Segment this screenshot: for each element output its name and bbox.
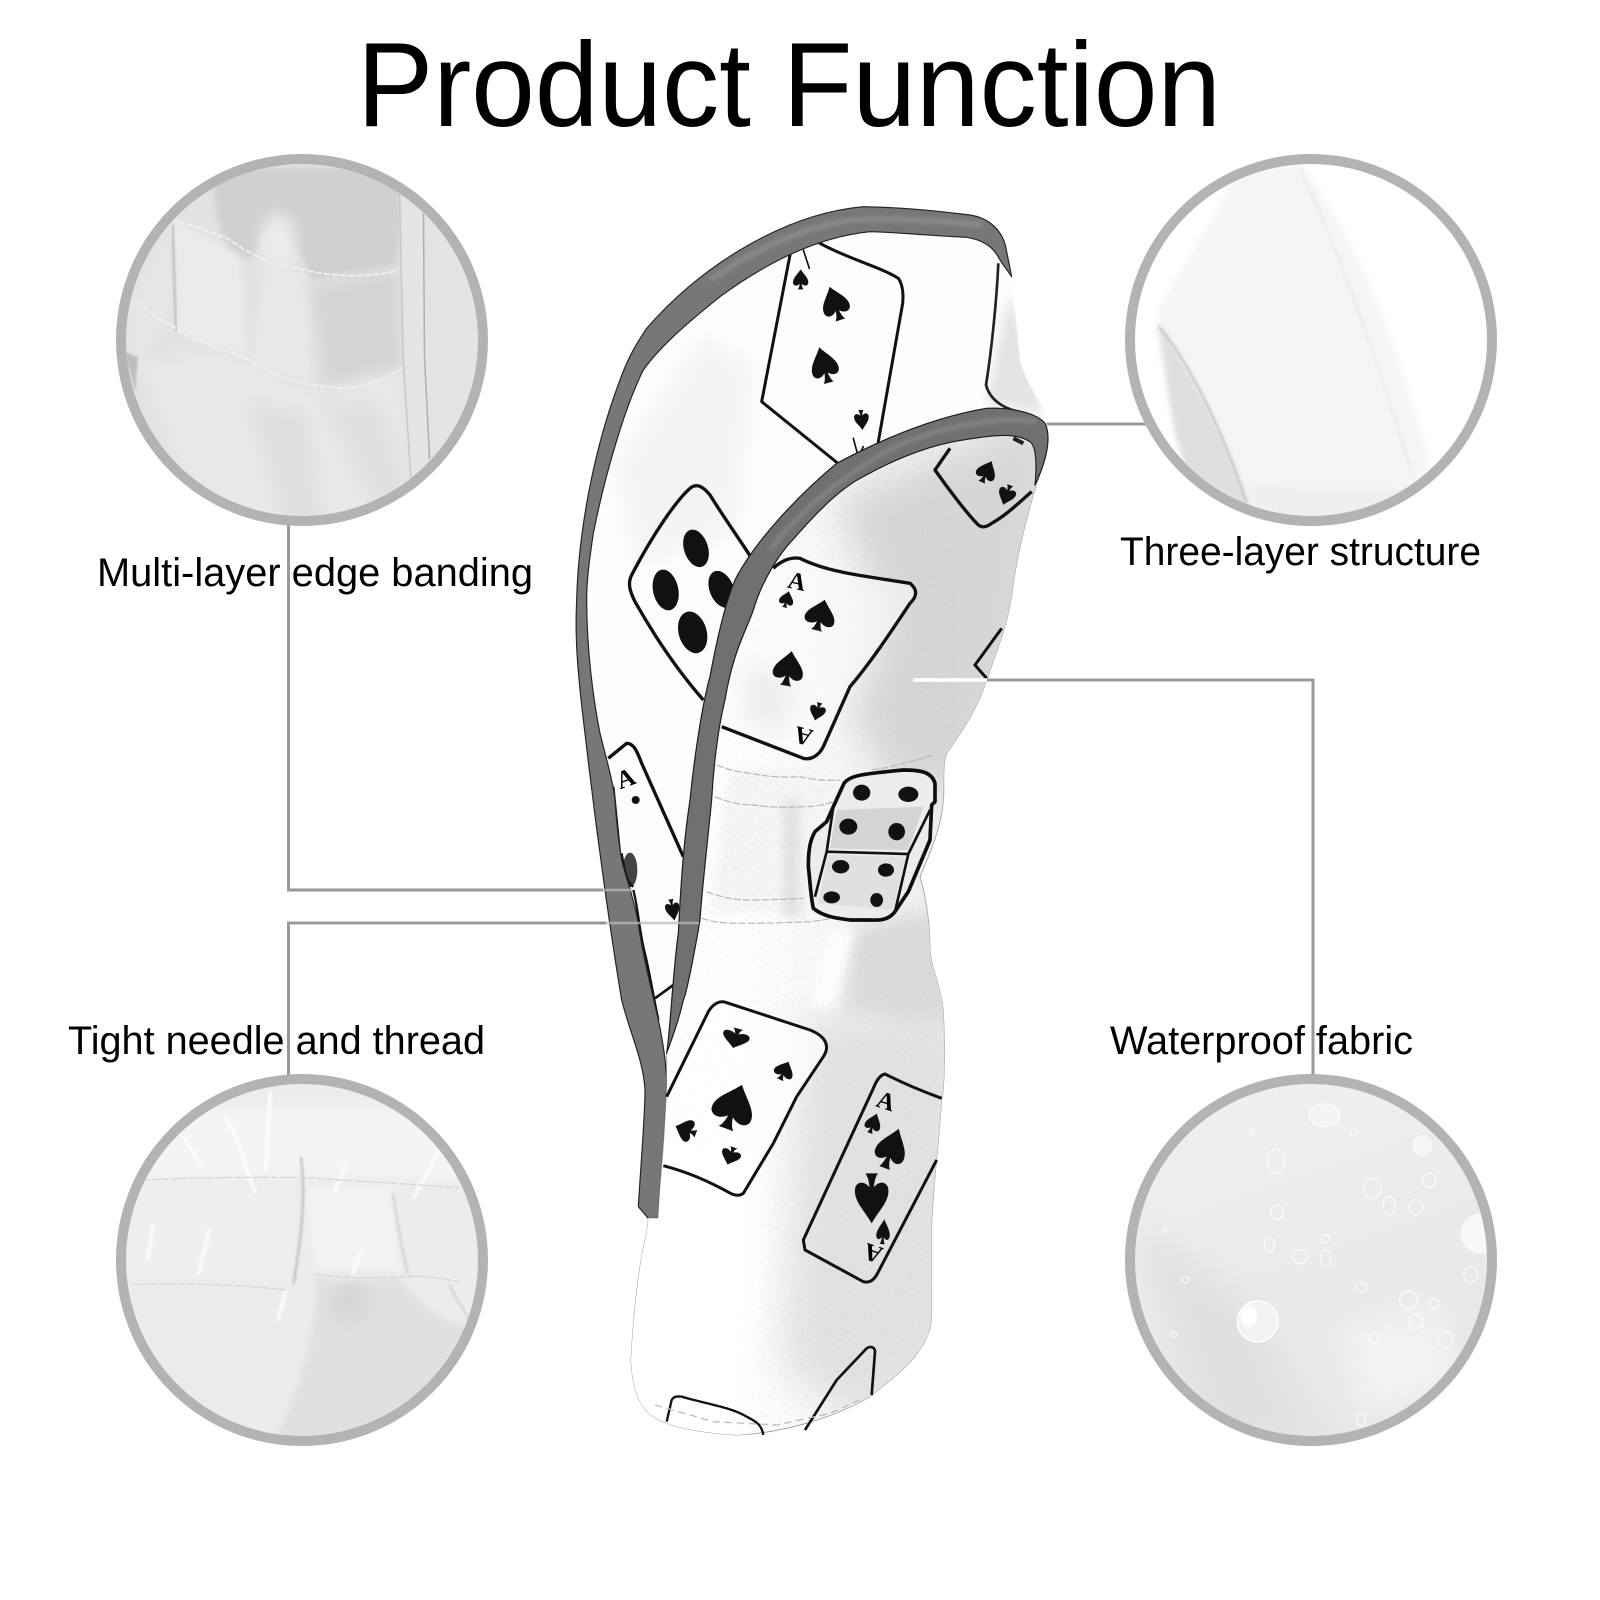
front card: large ace: A — [791, 720, 816, 751]
stitching: upper seam — [715, 755, 933, 807]
panel: waterproof fabric close-up — [1125, 1074, 1497, 1446]
back card: ace top — [762, 243, 903, 465]
front panel shading — [620, 413, 1053, 1453]
connector line: multi-layer edge banding — [288, 525, 603, 890]
front card: five of spades — [663, 1002, 827, 1195]
bright lower left fabric — [631, 1154, 757, 1435]
front panel fabric — [631, 408, 1048, 1435]
front card: bottom left partial — [667, 1396, 763, 1435]
fabric grain — [670, 524, 916, 1429]
band highlight — [770, 420, 1037, 550]
back binding band — [576, 207, 1012, 1218]
panel: three-layer structure close-up — [1125, 154, 1497, 526]
back card: four of spades with round pips — [629, 486, 752, 700]
label: three-layer structure: Three-layer structure — [1120, 530, 1481, 574]
panel: multi-layer edge banding close-up — [116, 154, 488, 526]
band highlight top — [710, 219, 983, 280]
front card: ace of spades lower right: A — [873, 1086, 899, 1117]
front card: right top — [935, 438, 1032, 527]
panel: tight needle and thread close-up — [116, 1074, 488, 1446]
line overlay: faint leader over product — [603, 680, 987, 923]
front card: large ace — [722, 558, 916, 759]
connector line: tight needle and thread — [288, 923, 606, 1076]
connector line: waterproof fabric — [985, 680, 1313, 1076]
label: tight needle and thread: Tight needle and thread — [68, 1019, 485, 1063]
stitching: hem — [655, 1398, 863, 1425]
back card: lower ace — [608, 743, 683, 1020]
product: golf club head cover — [570, 200, 1070, 1453]
connector line: three-layer structure — [1046, 422, 1148, 426]
back card: lower ace: A — [612, 762, 640, 795]
front card: ace of spades lower right: A — [860, 1237, 886, 1268]
title: Product Function — [357, 18, 1221, 152]
front card: bottom right partial — [805, 1347, 875, 1430]
front card: large ace: A — [785, 567, 809, 597]
back card: right edge partial — [986, 263, 1018, 412]
label: waterproof fabric: Waterproof fabric — [1110, 1019, 1413, 1063]
front binding band — [667, 408, 1048, 1053]
dice — [808, 770, 935, 920]
label: multi-layer edge banding: Multi-layer edge banding — [97, 551, 533, 595]
stitching: lower seam — [702, 892, 837, 923]
front card: ace of spades lower right — [803, 1074, 942, 1282]
back panel fabric — [622, 299, 1047, 555]
front card: partial right — [975, 628, 1002, 678]
